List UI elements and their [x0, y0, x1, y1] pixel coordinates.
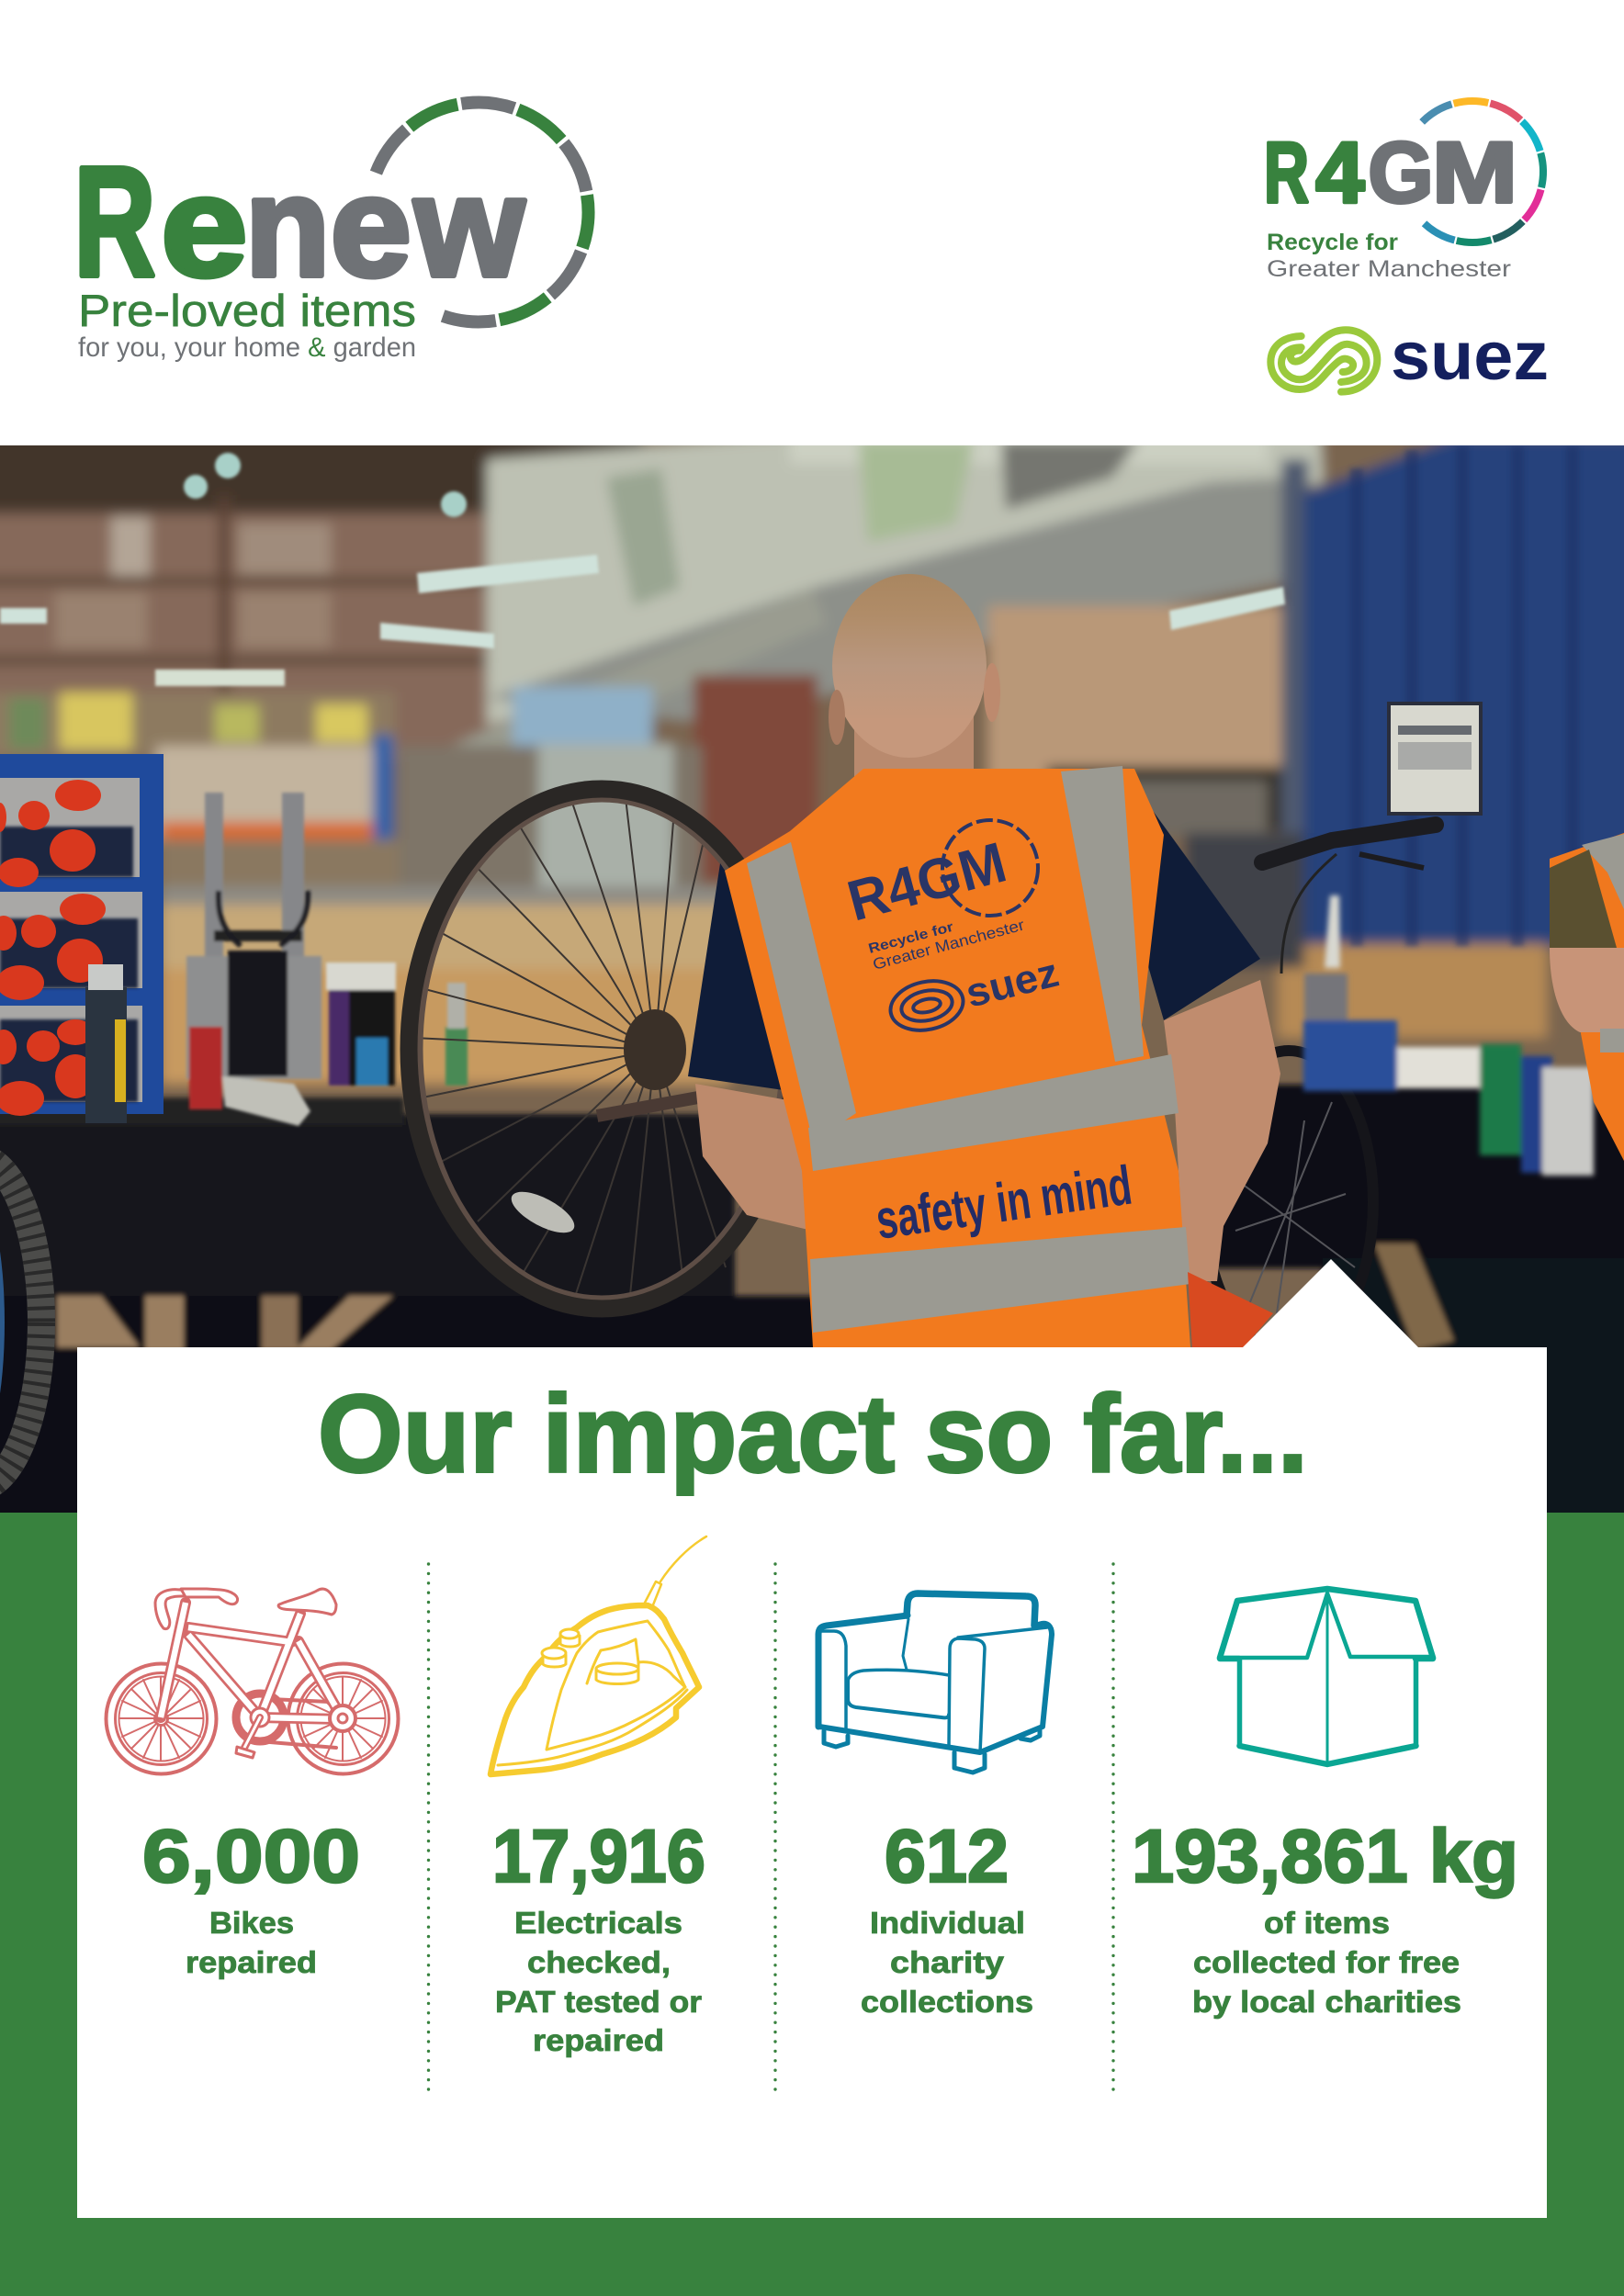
- divider: [427, 1564, 430, 2089]
- cassette: [624, 1009, 686, 1090]
- icon: SUEZ swirl: [1270, 330, 1377, 392]
- number: 193,861 kg: [1132, 1815, 1518, 1898]
- rim: [420, 799, 784, 1299]
- wordmark: Renew: e: [331, 147, 412, 306]
- logo: R4GM: [1264, 72, 1573, 282]
- spray can: [85, 964, 127, 1123]
- stat: bikes: [142, 1815, 360, 1979]
- big bicycle wheel: [409, 789, 795, 1309]
- strapline: for you, your home & garden: for you, your home & garden: [78, 332, 416, 363]
- tables: [0, 1085, 1624, 1535]
- vest: [725, 769, 1190, 1347]
- drawers: [0, 778, 142, 1102]
- label: repaired: [533, 2023, 664, 2057]
- tubes: double outline: [161, 1603, 343, 1719]
- icon: cardboard box: [1220, 1589, 1433, 1764]
- label: [495, 1906, 702, 2057]
- vest logo: safety in mind: [872, 1154, 1135, 1251]
- arms: [695, 1084, 808, 1230]
- photo: bike repair workshop: [0, 390, 1624, 1568]
- notice board: [1387, 702, 1483, 816]
- wordmark: R4GM: R: [1264, 124, 1309, 220]
- ring: dashed circle: [324, 58, 633, 366]
- label: Individual: [870, 1906, 1025, 1940]
- wordmark: R4GM: [1264, 124, 1517, 220]
- wordmark: R4GM: G: [1369, 124, 1433, 220]
- text: Recycle for: Recycle for: [1267, 230, 1398, 255]
- background bike, right: [1204, 825, 1436, 1354]
- heading: Our impact so far...: [318, 1372, 1308, 1495]
- label: charity: [890, 1945, 1005, 1979]
- label: [186, 1906, 317, 1979]
- tyre: [409, 789, 795, 1309]
- wordmark: Renew: R: [73, 135, 155, 310]
- reflector: [511, 1192, 575, 1232]
- label: of items: [1264, 1906, 1390, 1940]
- logo: SUEZ: [1270, 318, 1549, 394]
- label: [1192, 1906, 1461, 2019]
- label: collected for free: [1193, 1945, 1460, 1979]
- label: Bikes: [209, 1906, 294, 1940]
- label: repaired: [186, 1945, 317, 1979]
- panel background with arrow notch: [77, 1259, 1547, 2218]
- label: checked,: [527, 1945, 671, 1979]
- label: [861, 1906, 1033, 2019]
- panel: impact: [77, 1259, 1547, 2218]
- second worker, right: [1550, 833, 1624, 1161]
- wordmark: Renew: n: [245, 147, 330, 306]
- icon: armchair: [818, 1593, 1052, 1773]
- logo: Renew: [73, 58, 633, 366]
- label: by local charities: [1192, 1985, 1461, 2019]
- divider: [773, 1564, 777, 2089]
- workbench items, right: [1303, 895, 1594, 1176]
- divider: [1111, 1564, 1115, 2089]
- stat: charity collections: [861, 1815, 1033, 2019]
- wordmark: Renew: w: [413, 147, 524, 306]
- green band: [0, 1513, 1624, 2296]
- number: 17,916: [492, 1815, 705, 1898]
- ring: multicolour dashed circle: [1372, 72, 1573, 272]
- icon: bicycle: [107, 1589, 399, 1774]
- vest logo: Recycle for: [867, 919, 955, 957]
- blue drawer unit: [0, 754, 164, 1116]
- number: 6,000: [142, 1815, 360, 1898]
- sleeves: [688, 863, 781, 1090]
- wordmark: Renew: [73, 135, 524, 310]
- wordmark: R4GM: M: [1432, 124, 1517, 220]
- bottom left tyre: [0, 1157, 41, 1488]
- repair stand and bottles: [186, 793, 468, 1126]
- vest logo: [841, 820, 1135, 1251]
- number: 612: [885, 1815, 1009, 1898]
- spokes: [413, 790, 726, 1304]
- icon: iron: [491, 1536, 706, 1774]
- blue container ribs: [1350, 446, 1579, 946]
- label: Electricals: [514, 1906, 682, 1940]
- label: collections: [861, 1985, 1033, 2019]
- wordmark: R4GM: 4: [1315, 124, 1364, 220]
- stat: kg collected: [1132, 1815, 1518, 2019]
- wordmark: suez: suez: [1391, 318, 1549, 394]
- vest logo: R4GM: [841, 831, 1013, 934]
- ceiling and strip lights: [0, 453, 1285, 686]
- blurred background: [0, 445, 1624, 1347]
- man in hi-vis vest: [688, 574, 1280, 1347]
- text: Greater Manchester: Greater Manchester: [1267, 256, 1511, 282]
- neck and head: [829, 574, 1000, 781]
- vest logo: Greater Manchester: [871, 916, 1027, 974]
- reflective strips: [747, 766, 1190, 1333]
- orange can: [1188, 1272, 1273, 1350]
- label: PAT tested or: [495, 1985, 702, 2019]
- stat: electricals: [492, 1815, 705, 2057]
- red tyre patches: [0, 780, 106, 1116]
- strapline: pre-loved items: Pre-loved items: [78, 287, 416, 336]
- wordmark: Renew: e: [161, 147, 247, 306]
- vest logo: suez: [962, 950, 1063, 1017]
